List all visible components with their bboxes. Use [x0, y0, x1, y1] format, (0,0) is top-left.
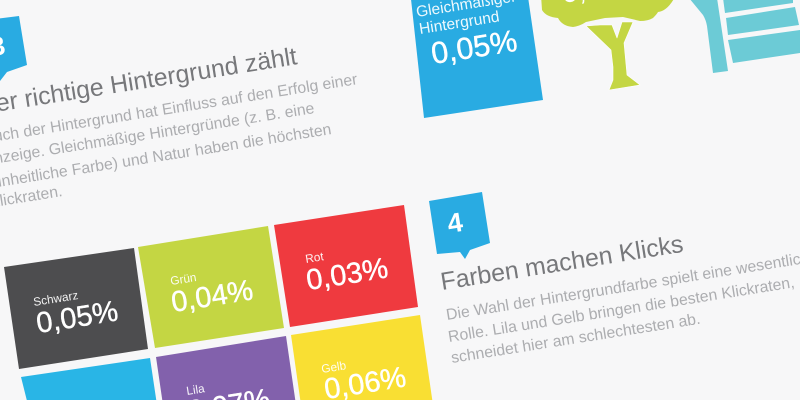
label: Gleichmäßiger Hintergrund: [415, 0, 517, 38]
panel: Grün: [138, 226, 284, 348]
panel: Gelb: [291, 315, 433, 400]
panel: Rot: 0,03%: [304, 252, 390, 297]
label: Gleichmäßiger Hintergrund: Hintergrund: [418, 8, 501, 38]
panel: Lila: [156, 336, 296, 400]
icon: number 4 marker: [429, 192, 490, 259]
panel: Lila: Lila: [185, 381, 206, 398]
section 3: background matters: [0, 16, 359, 211]
icon: number 4 marker: 4: [445, 207, 465, 239]
icon: teal building: [689, 0, 800, 73]
section 4: colours make clicks: [429, 192, 800, 367]
icon: number 3 marker: [0, 16, 27, 81]
chart: colour tiles with click rates: [4, 205, 433, 400]
panel: Schwarz: Schwarz: [32, 288, 79, 309]
text block: section 4 description: [445, 248, 800, 367]
icon: tree (nature): [541, 0, 676, 90]
panel: Grün: 0,04%: [169, 274, 255, 319]
text block: section 3 description: [0, 71, 359, 211]
heading: Farben machen Klicks: Farben machen Klicks: [439, 231, 685, 296]
panel: Gelb: Gelb: [320, 358, 348, 376]
panel: Blau: [21, 358, 157, 400]
panel: Rot: [274, 205, 418, 327]
panel: uniform background tile: [410, 0, 543, 118]
panel: Rot: Rot: [304, 249, 325, 266]
panel: Schwarz: [4, 248, 148, 369]
panel: Schwarz: 0,05%: [34, 295, 120, 340]
text block: section 4 description: schneidet hier am schlechtesten ab.: [450, 311, 702, 367]
value: 0,05%: 0,05%: [429, 24, 520, 71]
text block: section 4 description: Rolle. Lila und Gelb bringen die besten Klickraten,: [447, 274, 796, 346]
panel: Grün: Grün: [169, 270, 197, 288]
